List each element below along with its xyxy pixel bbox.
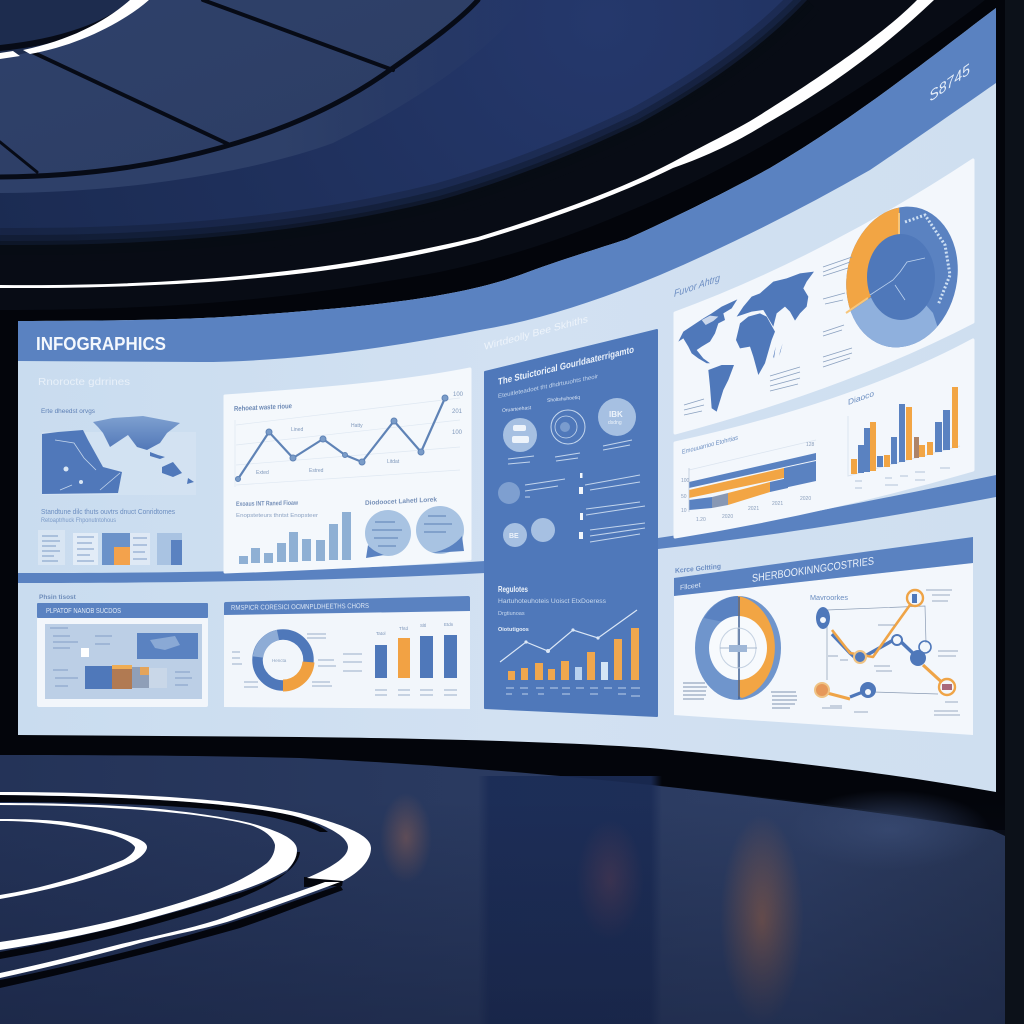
ring: outer <box>0 792 371 881</box>
divider band right <box>658 475 996 549</box>
line chart <box>236 392 464 482</box>
bubble heading: Diodoocet Lahetl Lorek <box>365 496 437 507</box>
screen frame <box>0 0 1006 830</box>
line chart: Litdat <box>387 459 400 465</box>
donut chart <box>258 634 308 686</box>
ceiling <box>0 0 807 245</box>
map caption: Standtune dilc thuts ouvtrs dnuct Conridtomes <box>41 509 175 516</box>
ring: second <box>0 803 297 950</box>
panel: line chart and sub-charts <box>225 369 470 572</box>
stacked chart numbers: 128 <box>806 442 815 448</box>
white cove light line <box>0 0 934 288</box>
regional map <box>42 416 194 494</box>
stacked chart numbers: 2021 <box>748 506 759 512</box>
panel: bottom middle <box>224 596 470 709</box>
ring: inner <box>0 819 147 899</box>
grouped columns <box>858 404 950 473</box>
centre combo chart <box>500 610 640 696</box>
line chart: 201 <box>452 409 463 415</box>
section heading: map: Fuvor Ahtrg <box>674 273 720 300</box>
column chart heading: Diaoco <box>848 389 874 407</box>
panel: left map: Retoaptrhuck Fhponutntohous <box>41 518 116 524</box>
panel: centre column: Drgtiunoas <box>498 611 525 617</box>
stacked chart numbers: 50 <box>681 494 687 500</box>
ring: lower <box>0 882 340 978</box>
title: INFOGRAPHICS <box>36 334 166 354</box>
line chart: Lined <box>291 427 303 433</box>
column chart heading: Exoaus INT Raned Fioaw <box>236 500 299 508</box>
panel: left map <box>38 409 196 565</box>
floor <box>0 755 1005 1024</box>
network labels <box>822 590 960 715</box>
code label top right: S8745 <box>928 61 971 106</box>
radial chart <box>846 206 958 348</box>
icon circles <box>498 395 636 547</box>
panel: centre column <box>485 330 657 716</box>
network diagram <box>810 590 960 715</box>
bubble charts <box>365 506 464 558</box>
floor light rings <box>0 792 371 988</box>
floor reflections <box>380 776 990 1024</box>
line chart: 100 <box>453 392 464 398</box>
lower centre heading: Regulotes <box>498 585 528 594</box>
bar chart <box>375 635 457 678</box>
divider band left <box>18 561 485 583</box>
icon circles: dsdng <box>608 420 622 426</box>
panel: bottom middle: Thtd <box>399 626 409 631</box>
section heading: left: Rnorocte gdrrines <box>38 377 130 388</box>
line chart heading: Rehoeat waste rioue <box>234 403 292 413</box>
section heading: centre: Wirtdeolly Bee Skhiths <box>484 314 588 353</box>
panel: stacked bars and column chart <box>675 340 973 537</box>
panel: world map and radial chart <box>675 160 973 433</box>
donut center label: Hencta <box>272 658 287 663</box>
mini mosaic chart <box>85 665 167 689</box>
line chart: 100 <box>452 430 463 436</box>
icon circles: Oruarteehast <box>502 405 532 414</box>
stacked chart numbers: 2020 <box>722 514 733 520</box>
panel: bottom middle: Etdn <box>444 622 454 627</box>
panel: bottom left <box>37 594 208 707</box>
header band <box>18 8 996 362</box>
line chart: Estred <box>309 468 324 474</box>
map callout lines <box>684 257 852 415</box>
soft shadow edge of ceiling recess <box>0 0 807 245</box>
panel header text: Fllceet <box>680 582 701 592</box>
icon circles: BE <box>509 533 519 540</box>
world map <box>678 272 814 412</box>
stacked chart numbers: 100 <box>681 478 690 484</box>
display screen <box>18 8 996 792</box>
panel: bottom middle: Tatol <box>376 631 386 636</box>
panel: centre column: Eteuitleteadoet tht dhdrtuuohts theoir <box>498 374 598 400</box>
panel: line chart and sub-charts: Enopsteteurs thntst Enopsteer <box>236 513 318 519</box>
thumbnail row <box>38 530 182 565</box>
column chart <box>239 512 351 564</box>
stacked bars <box>689 440 816 512</box>
map label: Erte dheedst orvgs <box>41 409 95 415</box>
icon circles: Sholtshuhoetiq <box>547 395 580 404</box>
panel header text: RMSPICR CORESICI OCMNPLDHEETHS CHORS <box>231 603 369 612</box>
ring chart <box>695 596 781 700</box>
icon circles: IBK <box>609 410 623 419</box>
stacked chart numbers: 10 <box>681 508 687 514</box>
stacked chart numbers: 1.20 <box>696 517 706 523</box>
panel: bottom middle: Sltl <box>420 623 426 628</box>
stacked chart numbers <box>681 442 815 523</box>
panel: centre column: Oiotutigoos <box>498 627 529 633</box>
panel header text: PLPATOF NANOB SUCDOS <box>46 608 121 615</box>
panel: bottom right <box>674 537 973 735</box>
ceiling white arc light <box>0 0 149 59</box>
panel: bottom right: SHERBOOKINNGCOSTRIES <box>752 555 874 585</box>
stacked chart numbers: 2020 <box>800 496 811 502</box>
ring chart notes <box>683 683 797 708</box>
stacked chart heading: Emouuarrioo Etohrtias <box>682 434 739 456</box>
section label: Phsin tisost <box>39 594 77 601</box>
network nodes <box>815 590 955 698</box>
line chart: Hatty <box>351 423 363 429</box>
network diagram: Mavroorkes <box>810 595 849 602</box>
line chart: Exted <box>256 470 269 476</box>
stacked chart numbers: 2021 <box>772 501 783 507</box>
centre text lines <box>508 440 645 542</box>
centre heading: The Stuictorical Gourldaaterrigamto <box>498 344 634 388</box>
centre bullets <box>579 473 583 539</box>
panel: centre column: Hartuhoteuhoteis Uoisct EtxDoeress <box>498 599 606 605</box>
ring shadows <box>0 795 343 988</box>
section label: Kcrce Gcltting <box>675 563 721 575</box>
